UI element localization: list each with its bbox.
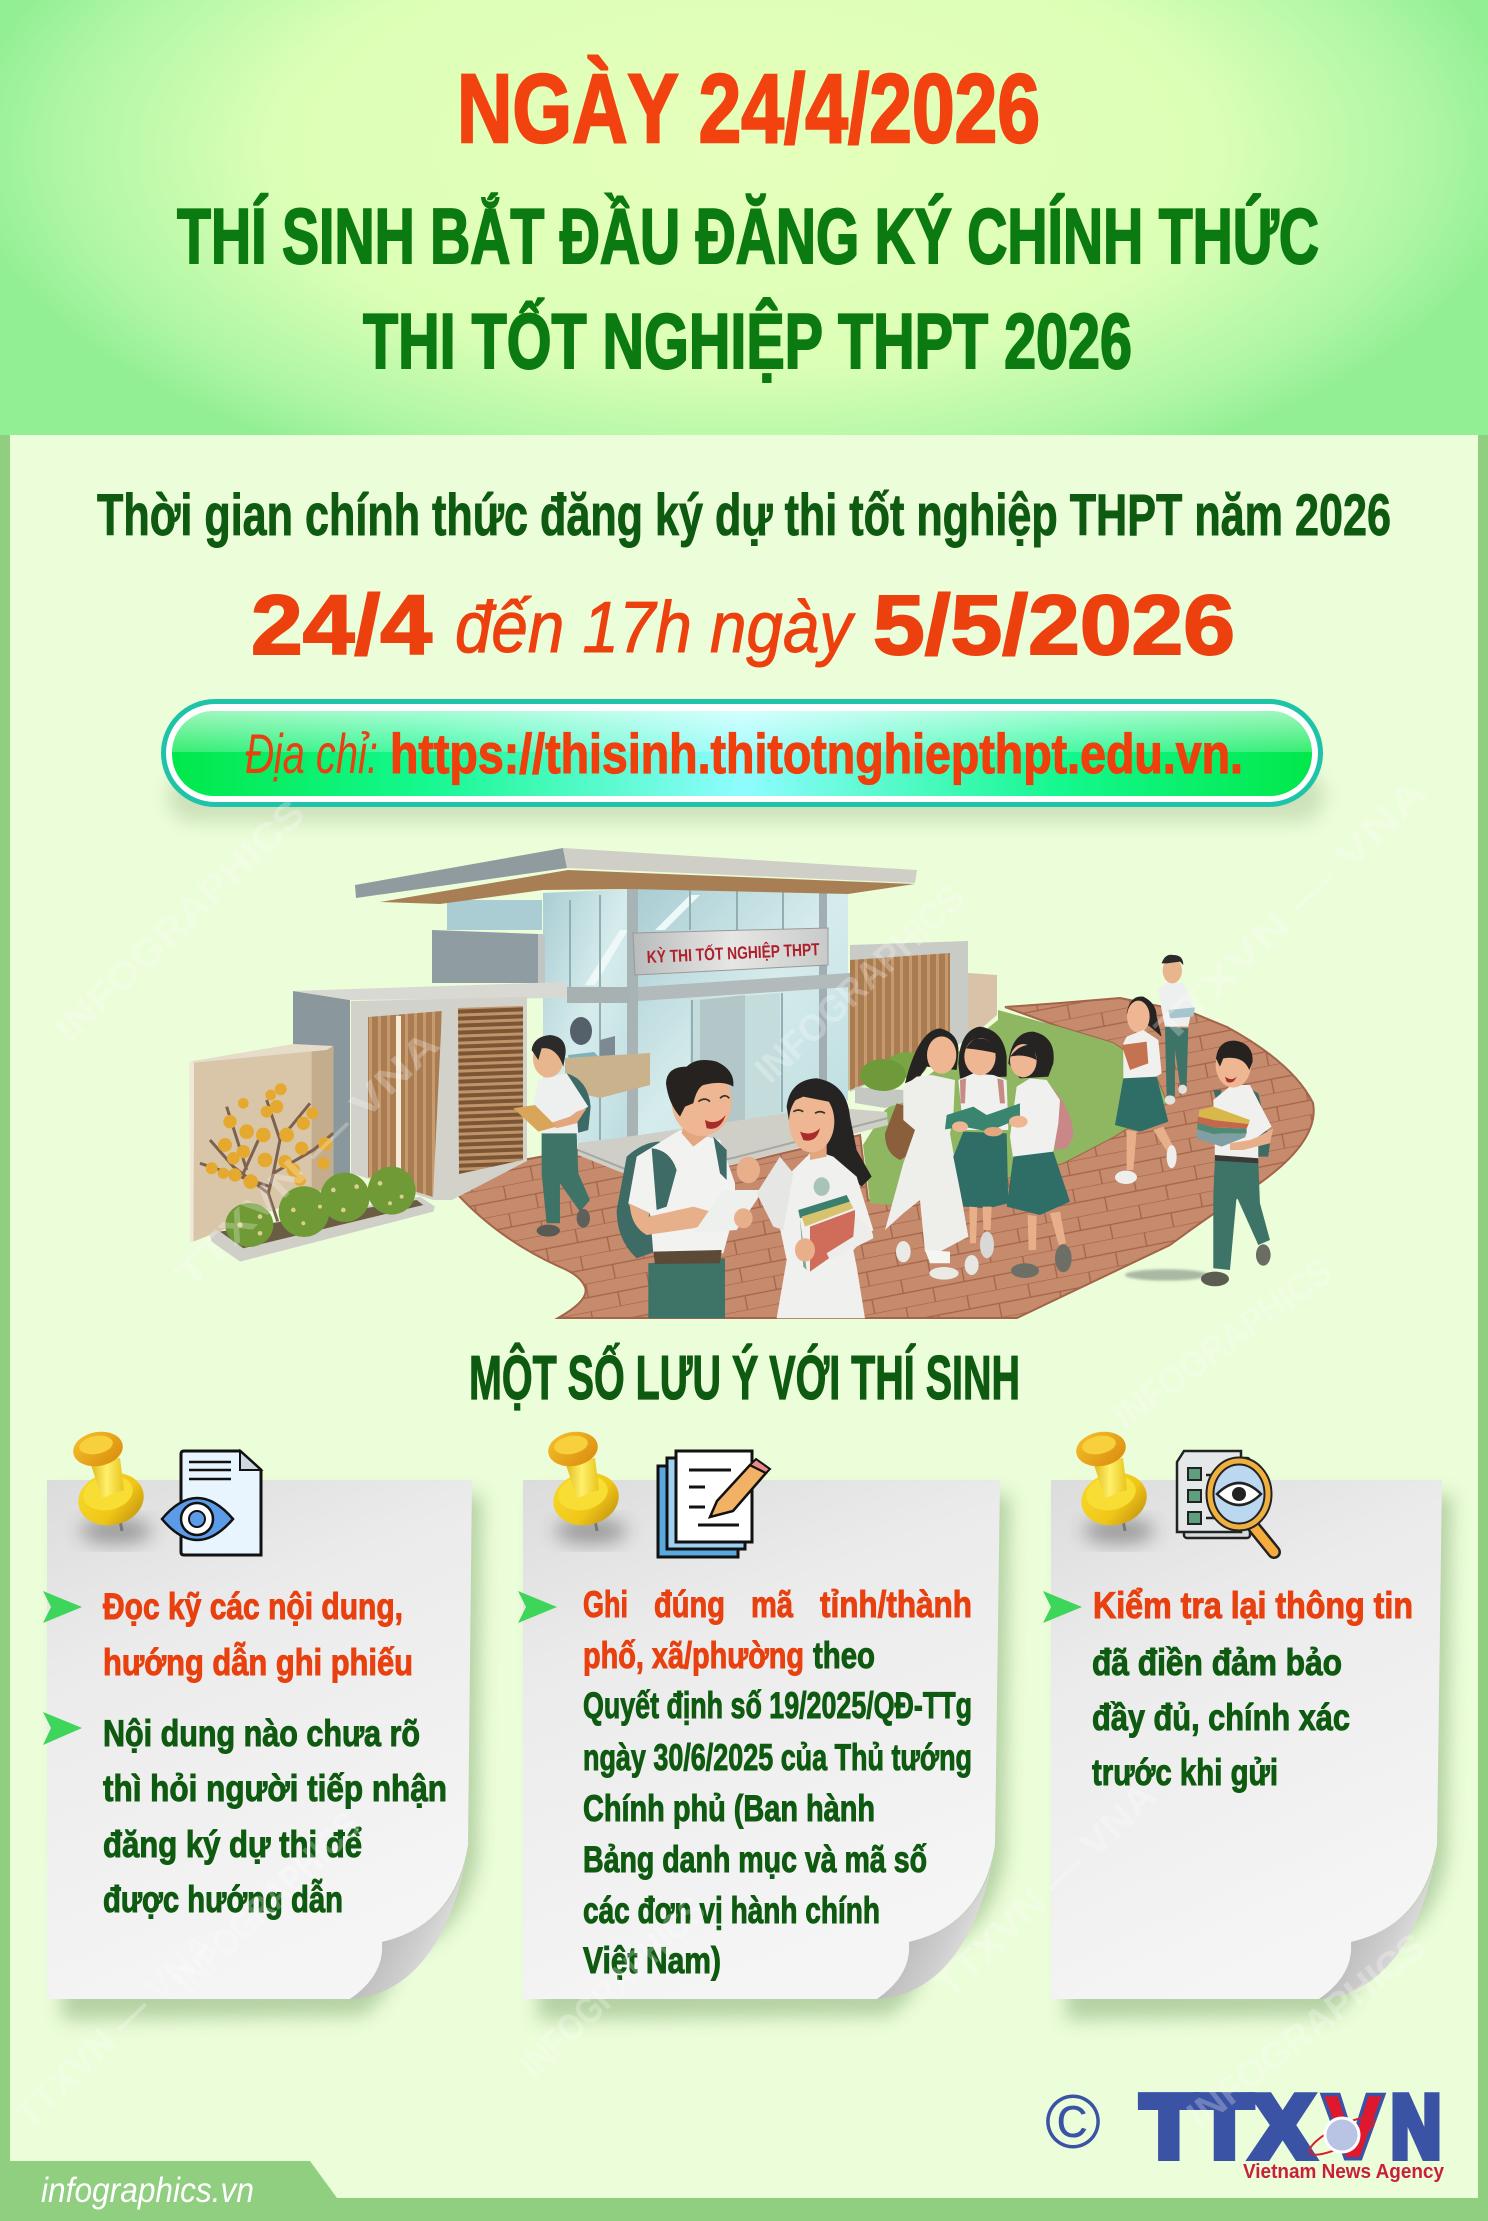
note 2 body text: đúng [654,1584,725,1625]
lawn [863,1010,1167,1206]
logo: TTXVN Vietnam News Agency [1141,2077,1445,2183]
icon: push pin [70,1428,152,1544]
note 2 body text [583,1584,972,1981]
note 1 heading: Đọc kỹ các nội dung, [103,1586,403,1627]
note 2 body text: Chính phủ (Ban hành [583,1788,875,1829]
open green book [945,1103,1020,1132]
text: TTXVN — VNA [167,1023,448,1296]
entrance platform [578,1107,888,1180]
title: date: NGÀY 24/4/2026 [457,54,1040,163]
note 3 text [1092,1585,1413,1793]
registration date range [251,578,1235,672]
three girls reading a book [885,1027,1073,1280]
text: INFOGRAPHICS [1180,1925,1434,2137]
icon: push pin [1073,1428,1155,1544]
note 2 body text: Bảng danh mục và mã số [583,1839,927,1880]
note 2 body text: Quyết định số 19/2025/QĐ-TTg [583,1685,972,1726]
girl in ao dai with brown backpack [885,1028,968,1280]
copyright symbol: © [1045,2080,1101,2165]
arrow bullet [518,1591,557,1623]
panel: note 1 [43,1428,482,2020]
header banner [0,0,1488,435]
note 3 text: trước khi gửi [1092,1752,1278,1793]
note 2 body text: phố, xã/phường [583,1635,804,1676]
note 2 body text: mã [751,1584,793,1625]
panel: note 3 [1043,1428,1452,2020]
title: line 3: THI TỐT NGHIỆP THPT 2026 [363,297,1132,385]
note 2 body text: Ghi [583,1584,628,1625]
website tab [10,2161,337,2210]
icon: document with eye [162,1451,261,1555]
text: TTXVN — VNA [927,1775,1165,2006]
panel: note 2 [518,1428,1010,2020]
round hedge bushes [225,1167,416,1247]
note 3 text: đã điền đảm bảo [1092,1642,1342,1683]
girl walking with book [1115,997,1177,1184]
logo: TTXVN Vietnam News Agency: V [1324,2077,1382,2176]
brick pavement [458,998,1314,1318]
logo: TTXVN Vietnam News Agency: Vietnam News Agency [1243,2161,1445,2183]
icon: checklist with magnifier [1177,1451,1274,1552]
note 2 body text: tỉnh/thành [820,1584,972,1625]
glass building [355,848,917,1180]
text: INFOGRAPHICS [1106,1250,1341,1437]
text: INFOGRAPHICS [47,792,314,1051]
student with clipboard [513,1035,591,1237]
right girl with pink backpack [1007,1032,1073,1278]
note 1 body: được hướng dẫn [103,1879,343,1920]
arrow bullet [43,1712,82,1745]
note 1 heading [103,1586,413,1683]
registration date range: đến 17h ngày [455,588,856,668]
text: INFOGRAPHICS [747,877,974,1092]
note 1 body: thì hỏi người tiếp nhận [103,1768,447,1809]
entrance sign [633,928,828,975]
text: TTXVN — VNA [7,1926,223,2136]
registration date range: 24/4 [251,578,432,672]
logo: TTXVN Vietnam News Agency: TTX [1141,2077,1313,2176]
left gate wall [293,982,567,1200]
icon: papers with pencil [658,1451,770,1557]
note 3 text: đầy đủ, chính xác [1092,1697,1350,1738]
receptionist [565,1017,650,1098]
address url: https://thisinh.thitotnghiepthpt.edu.vn. [390,722,1243,785]
note 1 body: Nội dung nào chưa rõ [103,1713,420,1754]
arrow bullet [1043,1591,1082,1623]
boy carrying stack of books [1125,1041,1273,1286]
address pill [161,699,1324,822]
arrow bullet [43,1591,82,1623]
address label: Địa chỉ: [245,722,378,785]
note 3 text: Kiểm tra lại thông tin [1093,1585,1413,1626]
middle girl [953,1027,1008,1275]
registration date range: 5/5/2026 [873,578,1235,672]
section heading: MỘT SỐ LƯU Ý VỚI THÍ SINH [469,1344,1020,1413]
note 2 body text: các đơn vị hành chính [583,1890,880,1931]
window beam [567,987,630,1003]
roof [380,870,915,904]
text: INFOGRAPHICS [167,1805,369,2001]
note 2 body text: theo [813,1635,875,1676]
small planter at right of entrance [855,1052,927,1108]
note 2 body text: Việt Nam) [583,1940,721,1981]
boy walking at the back [1158,955,1195,1105]
blossom wall and apricot tree [189,1044,435,1262]
boy with backpack and paper [617,1060,763,1318]
note 1 body: đăng ký dự thi để [103,1824,362,1865]
girl in white ao dai with books [737,1078,873,1318]
entrance sign: KỲ THI TỐT NGHIỆP THPT [646,938,820,967]
note 2 body text: ngày 30/6/2025 của Thủ tướng [583,1737,972,1778]
note 1 heading: hướng dẫn ghi phiếu [103,1642,413,1683]
icon: push pin [545,1428,627,1544]
text: INFOGRAPHICS [512,1890,714,2086]
text: TTXVN — VNA [1147,771,1435,1051]
logo: TTXVN Vietnam News Agency: N [1391,2077,1441,2176]
logo: TTXVN Vietnam News Agency: V [1324,2077,1382,2176]
illustration: exam registration building with students [189,848,1314,1318]
website tab: infographics.vn [41,2171,254,2210]
note 1 body [103,1713,447,1920]
right gate wall [827,941,997,1100]
